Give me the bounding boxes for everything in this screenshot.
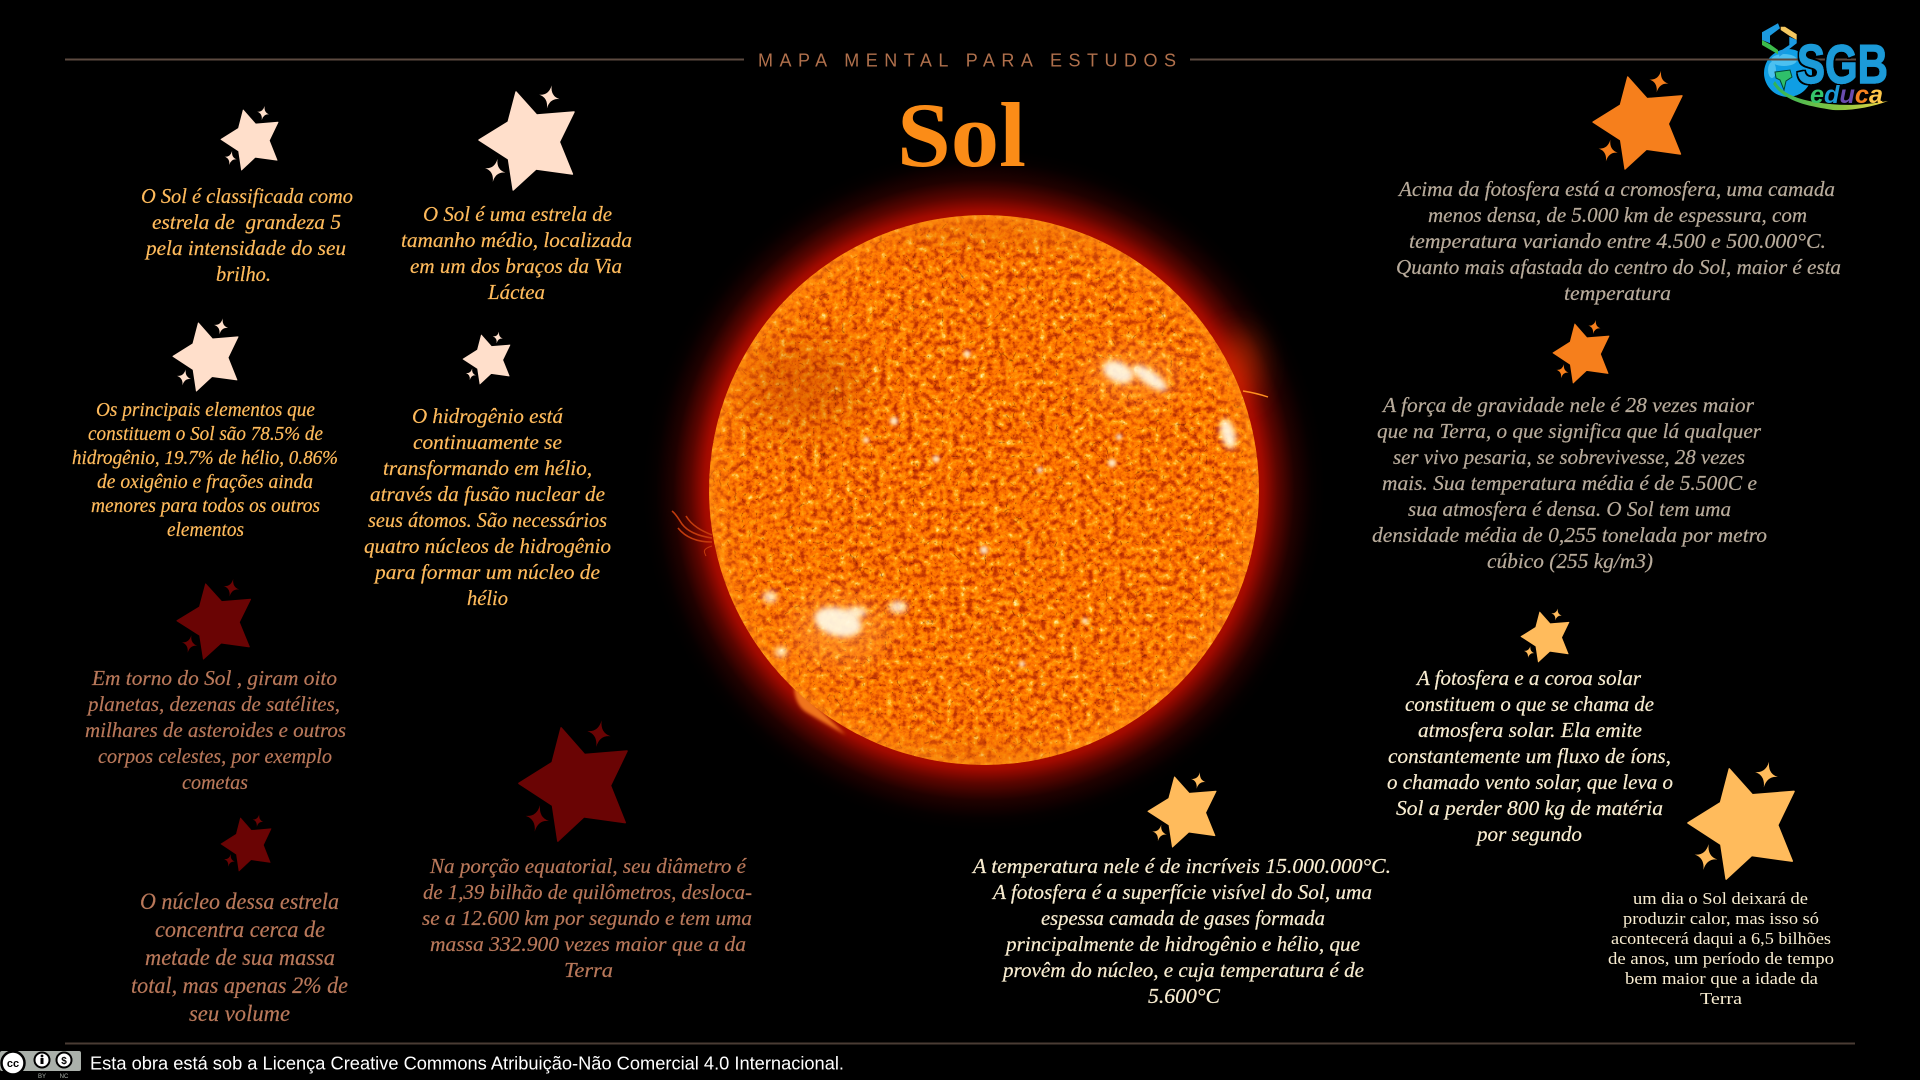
text: um dia: acontecerá daqui a 6,5 bilhões	[1611, 929, 1831, 948]
text: estrela de tamanho médio: Láctea	[487, 280, 545, 304]
license badge: NC	[60, 1074, 69, 1080]
text: porção equatorial: Na porção equatorial, seu diâmetro é	[429, 854, 747, 878]
text: núcleo: total, mas apenas 2% de	[131, 973, 348, 998]
text: porção equatorial: massa 332.900 vezes maior que a da	[430, 932, 746, 956]
logo wordmark SGB: SGB	[1797, 33, 1888, 95]
text: temperatura: espessa camada de gases formada	[1041, 906, 1325, 930]
text: em torno do Sol: planetas, dezenas de satélites,	[86, 692, 340, 716]
text: hidrogênio: quatro núcleos de hidrogênio	[364, 534, 611, 558]
header label: MAPA MENTAL PARA ESTUDOS	[758, 50, 1176, 70]
text: coroa solar: atmosfera solar. Ela emite	[1418, 718, 1642, 742]
text: cromosfera: Acima da fotosfera está a cromosfera, uma camada	[1397, 177, 1835, 201]
right flare	[1243, 391, 1268, 397]
text: principais elementos: Os principais elementos que	[96, 400, 315, 421]
text: em torno do Sol: cometas	[182, 770, 248, 794]
text: em torno do Sol: milhares de asteroides e outros	[85, 718, 346, 742]
lower left limb prominence	[794, 684, 846, 735]
text: em torno do Sol: corpos celestes, por exemplo	[98, 744, 332, 768]
text: temperatura: A fotosfera é a superfície visível do Sol, uma	[991, 880, 1372, 904]
text: grandeza: estrela de grandeza 5	[152, 210, 341, 234]
text: estrela de tamanho médio: tamanho médio, localizada	[401, 228, 632, 252]
text: hidrogênio: para formar um núcleo de	[373, 560, 600, 584]
cc icon	[2, 1052, 24, 1074]
text: hidrogênio: transformando em hélio,	[383, 456, 592, 480]
text: hidrogênio: continuamente se	[413, 430, 562, 454]
text: coroa solar: constituem o que se chama de	[1405, 692, 1654, 716]
text: temperatura	[971, 854, 1391, 1008]
text: coroa solar: por segundo	[1475, 822, 1582, 846]
logo mark	[1762, 23, 1888, 110]
text: em torno do Sol	[85, 666, 346, 794]
license badge: cc	[7, 1058, 19, 1070]
active region glows	[790, 596, 890, 664]
star dark red 7	[519, 718, 627, 841]
text: núcleo: concentra cerca de	[155, 917, 325, 942]
text: um dia: produzir calor, mas isso só	[1623, 909, 1819, 928]
title: Sol	[897, 84, 1026, 186]
logo hexagon	[1762, 23, 1797, 57]
upper right flare glow	[1220, 331, 1260, 399]
text: porção equatorial: se a 12.600 km por segundo e tem uma	[422, 906, 752, 930]
active region lower left	[763, 591, 907, 657]
header rule right	[1190, 58, 1856, 60]
text: principais elementos: de oxigênio e frações ainda	[97, 472, 313, 493]
active region upper right	[1099, 356, 1239, 450]
text: um dia: bem maior que a idade da	[1625, 969, 1818, 988]
text: principais elementos: elementos	[167, 520, 244, 541]
text: gravidade: A força de gravidade nele é 28 vezes maior	[1381, 393, 1755, 417]
text: coroa solar: A fotosfera e a coroa solar	[1415, 666, 1642, 690]
text: estrela de tamanho médio: em um dos braços da Via	[410, 254, 622, 278]
text: gravidade: cúbico (255 kg/m3)	[1487, 549, 1653, 573]
text: principais elementos: menores para todos os outros	[91, 496, 320, 517]
text: temperatura: provêm do núcleo, e cuja temperatura é de	[1001, 958, 1364, 982]
nc icon	[56, 1052, 72, 1068]
left prominence	[672, 511, 712, 556]
text: estrela de tamanho médio: O Sol é uma estrela de	[423, 202, 612, 226]
text: hidrogênio	[364, 404, 611, 610]
text: grandeza	[141, 184, 353, 286]
star dark red 5	[177, 577, 250, 659]
sun image	[658, 164, 1310, 816]
text: núcleo: O núcleo dessa estrela	[140, 889, 339, 914]
text: coroa solar: Sol a perder 800 kg de matéria	[1396, 796, 1663, 820]
header rule left	[65, 58, 744, 60]
text: cromosfera: menos densa, de 5.000 km de espessura, com	[1428, 203, 1807, 227]
star orange 9	[1553, 319, 1609, 383]
text: cromosfera: temperatura	[1564, 281, 1671, 305]
text: gravidade: mais. Sua temperatura média é de 5.500C e	[1382, 471, 1757, 495]
text: porção equatorial: Terra	[564, 958, 613, 982]
text: núcleo	[131, 889, 348, 1026]
star orange 8	[1593, 69, 1682, 169]
license badge: $	[61, 1056, 67, 1067]
text: coroa solar	[1387, 666, 1673, 846]
license badge	[0, 1051, 81, 1080]
logo continent	[1775, 70, 1792, 90]
by icon	[34, 1052, 50, 1068]
license text: Esta obra está sob a Licença Creative Commons Atribuição-Não Comercial 4.0 Internacional.	[90, 1054, 844, 1074]
star cream 1	[221, 105, 278, 170]
star yellow 11	[1148, 771, 1216, 847]
logo globe	[1764, 49, 1812, 97]
text: um dia	[1608, 889, 1834, 1008]
text: grandeza: pela intensidade do seu	[144, 236, 346, 260]
text: núcleo: seu volume	[189, 1001, 290, 1026]
text: gravidade: que na Terra, o que significa que lá qualquer	[1377, 419, 1762, 443]
text: porção equatorial	[422, 854, 752, 982]
text: em torno do Sol: Em torno do Sol , giram oito	[91, 666, 337, 690]
text: temperatura: principalmente de hidrogênio e hélio, que	[1004, 932, 1360, 956]
text: hidrogênio: através da fusão nuclear de	[370, 482, 605, 506]
text: temperatura: 5.600°C	[1148, 984, 1221, 1008]
text: coroa solar: o chamado vento solar, que leva o	[1387, 770, 1673, 794]
text: grandeza: brilho.	[216, 262, 271, 286]
star yellow 10	[1521, 607, 1569, 662]
footer rule	[65, 1042, 1855, 1044]
logo wordmark educa: educa	[1810, 81, 1883, 109]
text: cromosfera	[1396, 177, 1841, 305]
text: hidrogênio: O hidrogênio está	[412, 404, 563, 428]
text: estrela de tamanho médio	[401, 202, 632, 304]
text: um dia: um dia o Sol deixará de	[1633, 889, 1808, 908]
dark regions	[740, 345, 860, 425]
text: hidrogênio: seus átomos. São necessários	[368, 508, 607, 532]
text: principais elementos: hidrogênio, 19.7% de hélio, 0.86%	[72, 448, 338, 469]
logo swoosh	[1773, 81, 1888, 110]
sun glow	[639, 145, 1329, 835]
text: coroa solar: constantemente um fluxo de íons,	[1388, 744, 1671, 768]
star cream 3	[173, 317, 238, 391]
text: um dia: Terra	[1700, 989, 1743, 1008]
text: grandeza: O Sol é classificada como	[141, 184, 353, 208]
text: gravidade: densidade média de 0,255 tonelada por metro	[1372, 523, 1767, 547]
text: principais elementos: constituem o Sol são 78.5% de	[88, 424, 323, 445]
sun disc	[705, 210, 1265, 772]
text: gravidade	[1372, 393, 1767, 573]
text: cromosfera: temperatura variando entre 4.500 e 500.000°C.	[1409, 229, 1826, 253]
text: gravidade: sua atmosfera é densa. O Sol tem uma	[1408, 497, 1731, 521]
text: um dia: de anos, um período de tempo	[1608, 949, 1834, 968]
text: núcleo: metade de sua massa	[145, 945, 335, 970]
star cream 2	[479, 83, 574, 190]
limb brightening	[709, 215, 1259, 765]
text: hidrogênio: hélio	[467, 586, 508, 610]
text: principais elementos	[72, 400, 338, 541]
text: porção equatorial: de 1,39 bilhão de quilômetros, desloca-	[423, 880, 752, 904]
star yellow 12	[1688, 759, 1794, 879]
badge labels: BY	[38, 1074, 46, 1080]
text: gravidade: ser vivo pesaria, se sobrevivesse, 28 vezes	[1393, 445, 1745, 469]
star cream 4	[463, 331, 510, 384]
text: cromosfera: Quanto mais afastada do centro do Sol, maior é esta	[1396, 255, 1841, 279]
star dark red 6	[221, 813, 271, 871]
scattered bright specks	[863, 350, 1122, 667]
text: temperatura: A temperatura nele é de incríveis 15.000.000°C.	[971, 854, 1391, 878]
